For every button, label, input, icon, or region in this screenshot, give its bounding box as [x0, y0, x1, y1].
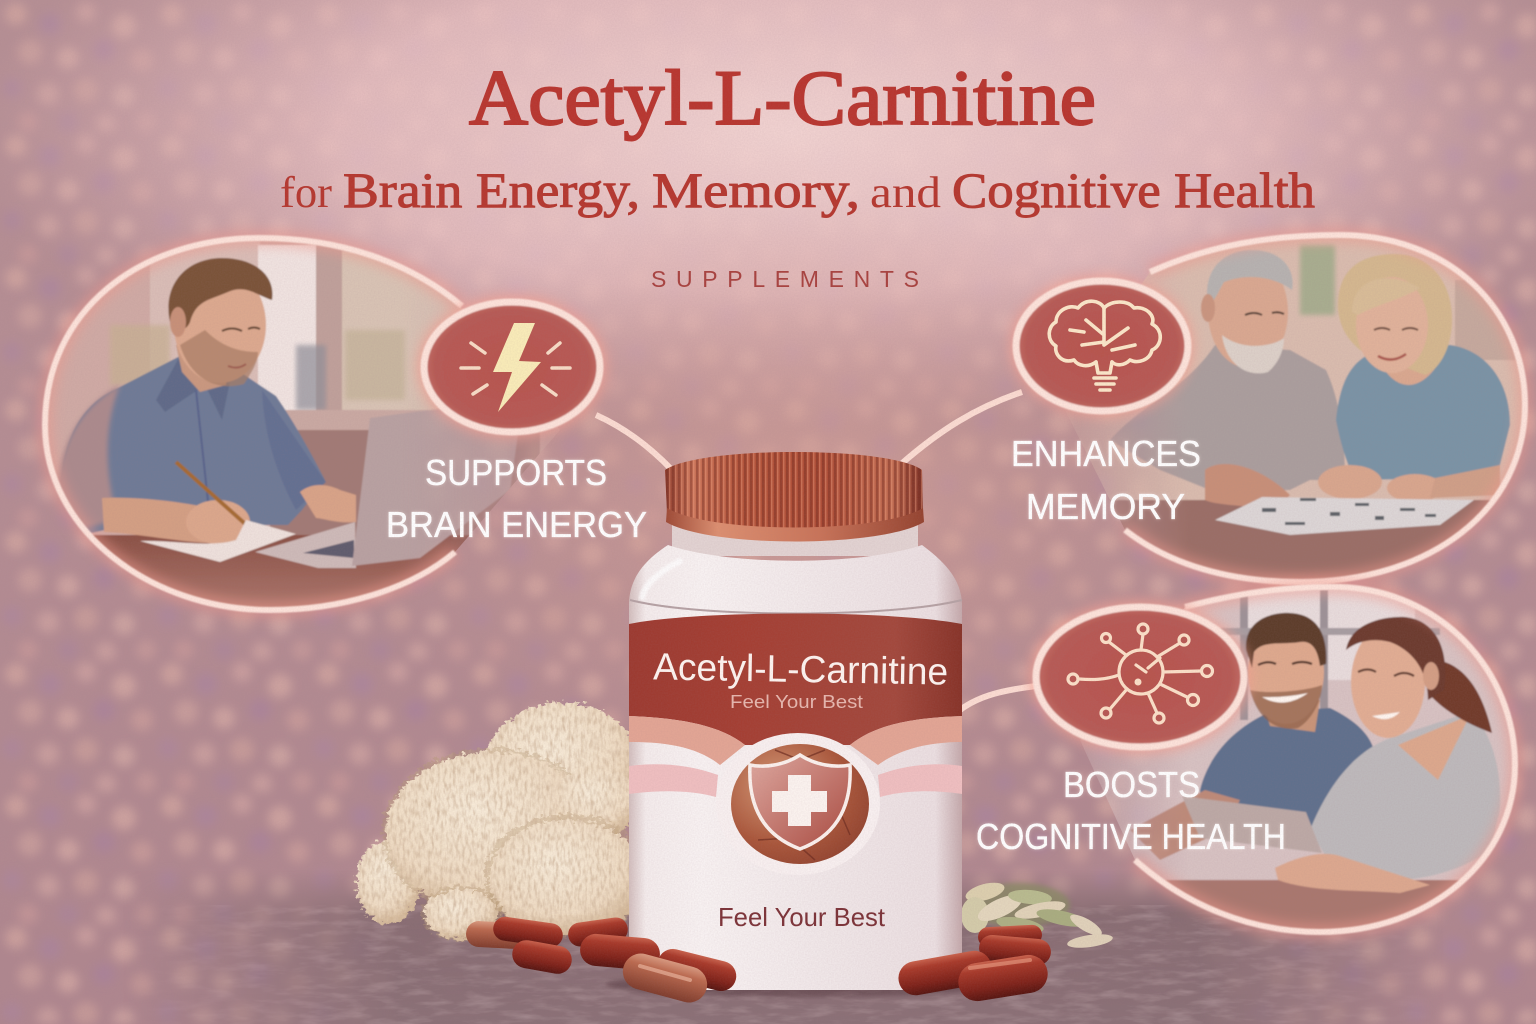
subtitle: Memory,	[652, 162, 860, 218]
woman's head	[1351, 626, 1425, 738]
subtitle: Brain Energy,	[343, 162, 640, 218]
label band	[629, 614, 962, 745]
benefit label: supports brain energy	[386, 452, 647, 545]
benefit label: boosts cognitive health: BOOSTS	[1063, 764, 1200, 805]
bottle body	[629, 545, 962, 990]
red capsules	[465, 915, 1052, 1007]
icon: neuron network	[1029, 600, 1251, 754]
benefit label: boosts cognitive health: COGNITIVE HEALTH	[976, 816, 1286, 857]
man's torso	[60, 355, 325, 540]
man's arms and hands	[102, 496, 206, 544]
man's sweater	[1110, 345, 1345, 490]
benefit label: supports brain energy: SUPPORTS	[425, 452, 607, 493]
pen	[174, 460, 246, 526]
woman's head and hair	[1338, 254, 1452, 375]
ring	[1125, 235, 1525, 582]
title: Acetyl-L-Carnitine	[469, 54, 1096, 141]
woman's shirt	[1310, 712, 1500, 882]
woman's blouse	[1336, 345, 1510, 480]
notebook	[140, 520, 296, 562]
bottle neck	[672, 520, 918, 556]
benefit label: boosts cognitive health	[976, 764, 1286, 857]
connectors from bottle to icons	[596, 392, 1036, 710]
benefit label: enhances memory: ENHANCES	[1011, 433, 1201, 474]
man's shirt	[1200, 708, 1375, 840]
man's neck	[176, 345, 232, 392]
icon: lightning bolt	[417, 295, 607, 439]
benefit label: enhances memory: MEMORY	[1026, 486, 1185, 527]
panel: cognitive health scene	[1080, 580, 1530, 940]
shield badge	[716, 733, 880, 875]
subtitle: for	[280, 168, 332, 217]
man's head	[174, 288, 267, 382]
bottle cap	[665, 452, 924, 542]
man's head	[1208, 276, 1288, 366]
hands	[1318, 465, 1382, 499]
puzzle	[1215, 497, 1474, 535]
benefit label: enhances memory	[1011, 433, 1201, 527]
section label: supplements: SUPPLEMENTS	[651, 266, 919, 292]
subtitle	[280, 162, 1315, 218]
benefit label: supports brain energy: BRAIN ENERGY	[386, 504, 647, 545]
subtitle: and	[870, 168, 941, 217]
lower tagline: Feel Your Best	[718, 902, 886, 932]
seeds and leaves right of bottle	[961, 879, 1114, 950]
laptop	[255, 522, 356, 568]
ring	[1135, 587, 1515, 932]
photo: couple with tablet	[1080, 580, 1530, 940]
lion's mane mushroom	[356, 702, 649, 941]
hands	[1275, 854, 1430, 893]
tablet	[1182, 796, 1322, 853]
icon: brain with light bulb	[1010, 275, 1194, 417]
label tagline: Feel Your Best	[730, 692, 863, 712]
man's head	[1262, 700, 1320, 732]
label waves	[629, 716, 745, 765]
panel: brain energy scene	[40, 230, 580, 625]
supplement bottle	[605, 452, 995, 997]
woman's ponytail	[1420, 659, 1492, 733]
panel: memory scene	[1050, 230, 1536, 590]
medical cross	[772, 775, 827, 826]
shield	[750, 755, 850, 849]
label product name: Acetyl-L-Carnitine	[653, 646, 949, 694]
ring	[45, 238, 462, 610]
photo: man writing at laptop	[48, 241, 550, 608]
photo: couple solving puzzle	[1074, 238, 1522, 579]
bottle shadow	[605, 973, 995, 997]
subtitle: Cognitive Health	[952, 162, 1315, 218]
